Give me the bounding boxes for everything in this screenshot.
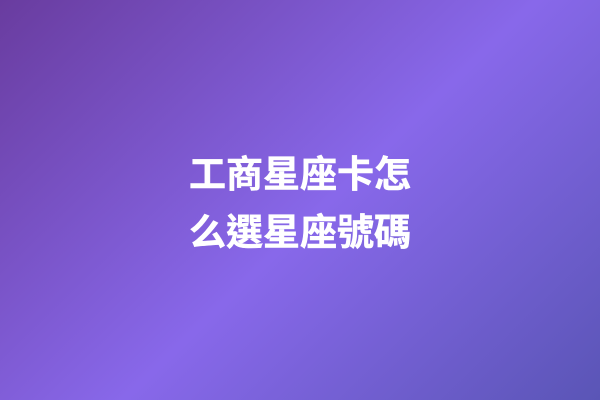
title: 工商星座卡怎: [189, 154, 411, 195]
title: [189, 154, 411, 253]
title: 么選星座號碼: [189, 212, 411, 253]
